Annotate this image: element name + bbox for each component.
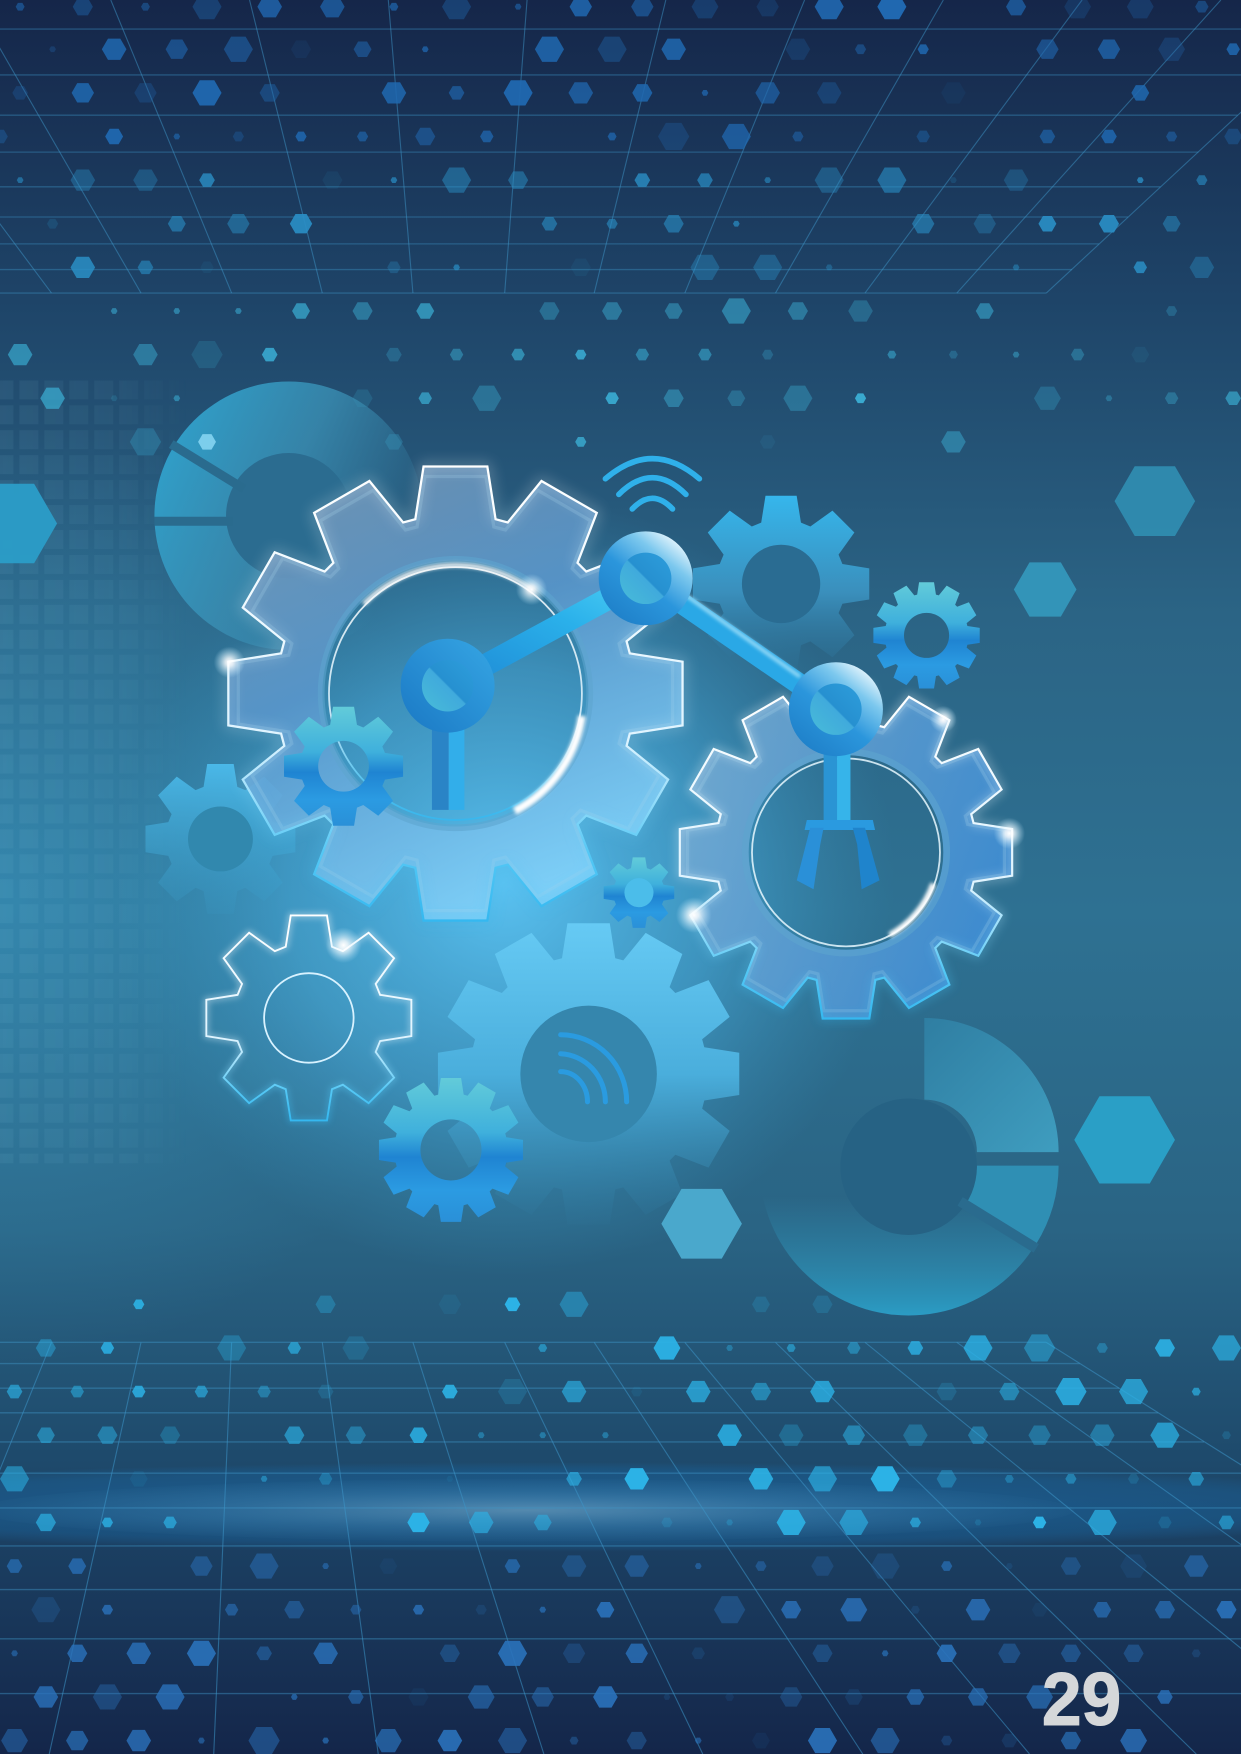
hexagons: middle rows — [17, 168, 1214, 280]
left pixel grid pattern — [0, 380, 76, 484]
donut chart: lower right — [760, 1018, 1059, 1316]
robot gripper — [797, 820, 880, 889]
hexagons: lower-middle rows — [0, 298, 1241, 453]
page number: 29 — [1042, 1657, 1121, 1741]
light sparkles — [214, 574, 1025, 963]
floor glow band — [0, 1462, 1241, 1552]
robot arm — [401, 531, 883, 889]
gear: right large outlined — [680, 686, 1012, 1019]
gear: small multi-tone left — [284, 707, 403, 826]
hexagons: floor lower rows — [1, 1553, 1237, 1754]
gear: large solid with wifi symbol — [438, 923, 739, 1224]
gear: small multi-tone right — [873, 582, 980, 689]
ceiling perspective grid — [0, 0, 1241, 293]
large decorative hexagons — [0, 466, 1195, 1183]
gear: outlined lower left — [206, 915, 411, 1120]
gear: faded left — [145, 764, 295, 914]
gear: small multi-tone center — [604, 857, 674, 928]
icon: wifi signal above arm — [605, 459, 699, 509]
floor perspective grid — [0, 1342, 1241, 1754]
gear: medium multi-tone bottom — [379, 1078, 523, 1222]
joint: wrist — [789, 662, 883, 756]
joint: base — [401, 639, 495, 733]
joint: elbow — [599, 531, 693, 625]
hexagons: floor upper rows — [0, 1292, 1241, 1535]
donut chart: upper left — [130, 381, 423, 650]
decorative hexagon in front of gear — [661, 1189, 742, 1259]
gear: main large outlined — [228, 467, 683, 921]
hexagons: upper rows — [0, 0, 1241, 150]
gear: solid behind arm, upper right — [693, 496, 869, 672]
central glow — [67, 447, 962, 1342]
